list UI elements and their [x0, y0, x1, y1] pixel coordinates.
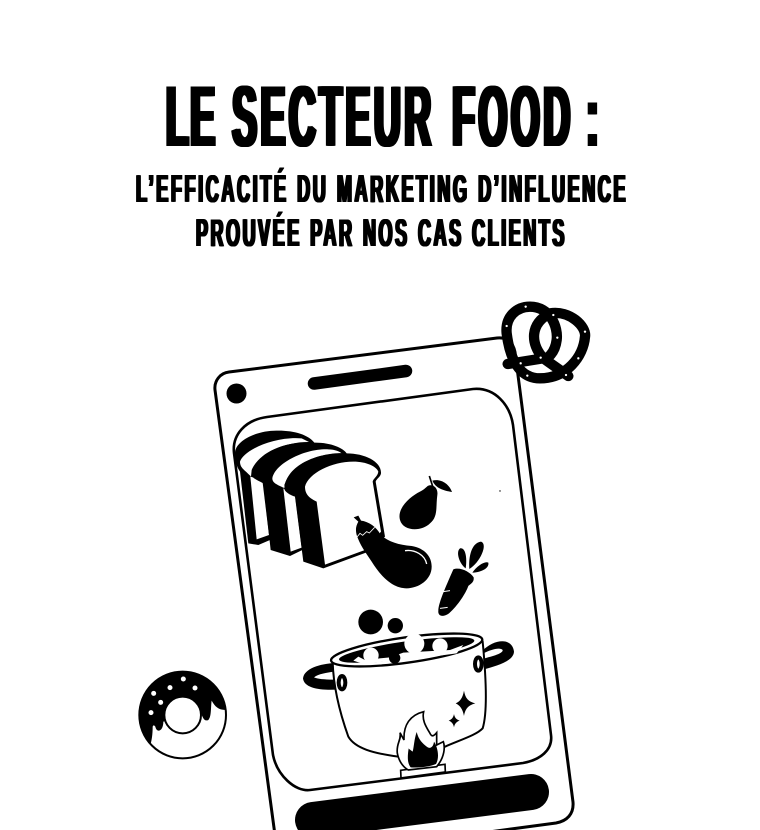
flame: [397, 712, 444, 770]
pot body: [333, 642, 486, 757]
phone illustration: [215, 338, 573, 830]
pretzel: [505, 305, 586, 378]
steam bubbles: [358, 610, 403, 634]
pot rim: [329, 627, 484, 673]
bread loaf slices: [235, 431, 385, 568]
phone camera dot: [226, 384, 246, 404]
burner: [401, 764, 445, 778]
phone bottom button: [313, 792, 531, 820]
left handle: [303, 663, 342, 690]
donut body: [139, 672, 226, 758]
cooking pot with flame: [303, 610, 514, 778]
pot rivets: [339, 657, 482, 689]
title: LE SECTEUR FOOD :: [166, 69, 602, 165]
food in pot: [353, 634, 463, 664]
phone outline: [215, 338, 573, 830]
donut: [139, 671, 226, 758]
phone speaker bar: [314, 371, 406, 384]
donut hole: [164, 697, 201, 733]
subtitle line 2: PROUVÉE PAR NOS CAS CLIENTS: [196, 212, 567, 255]
subtitle line 1: L’EFFICACITÉ DU MARKETING D’INFLUENCE: [136, 168, 628, 211]
eggplant: [354, 516, 432, 588]
flame core: [408, 732, 438, 768]
carrot: [438, 542, 488, 616]
speck: [499, 490, 501, 492]
right handle: [483, 641, 514, 670]
sparkles: [449, 691, 475, 727]
donut icing: [139, 671, 226, 744]
donut sprinkles: [148, 676, 197, 715]
pear: [399, 476, 452, 529]
pot inside: [338, 632, 476, 668]
phone screen: [234, 389, 551, 790]
